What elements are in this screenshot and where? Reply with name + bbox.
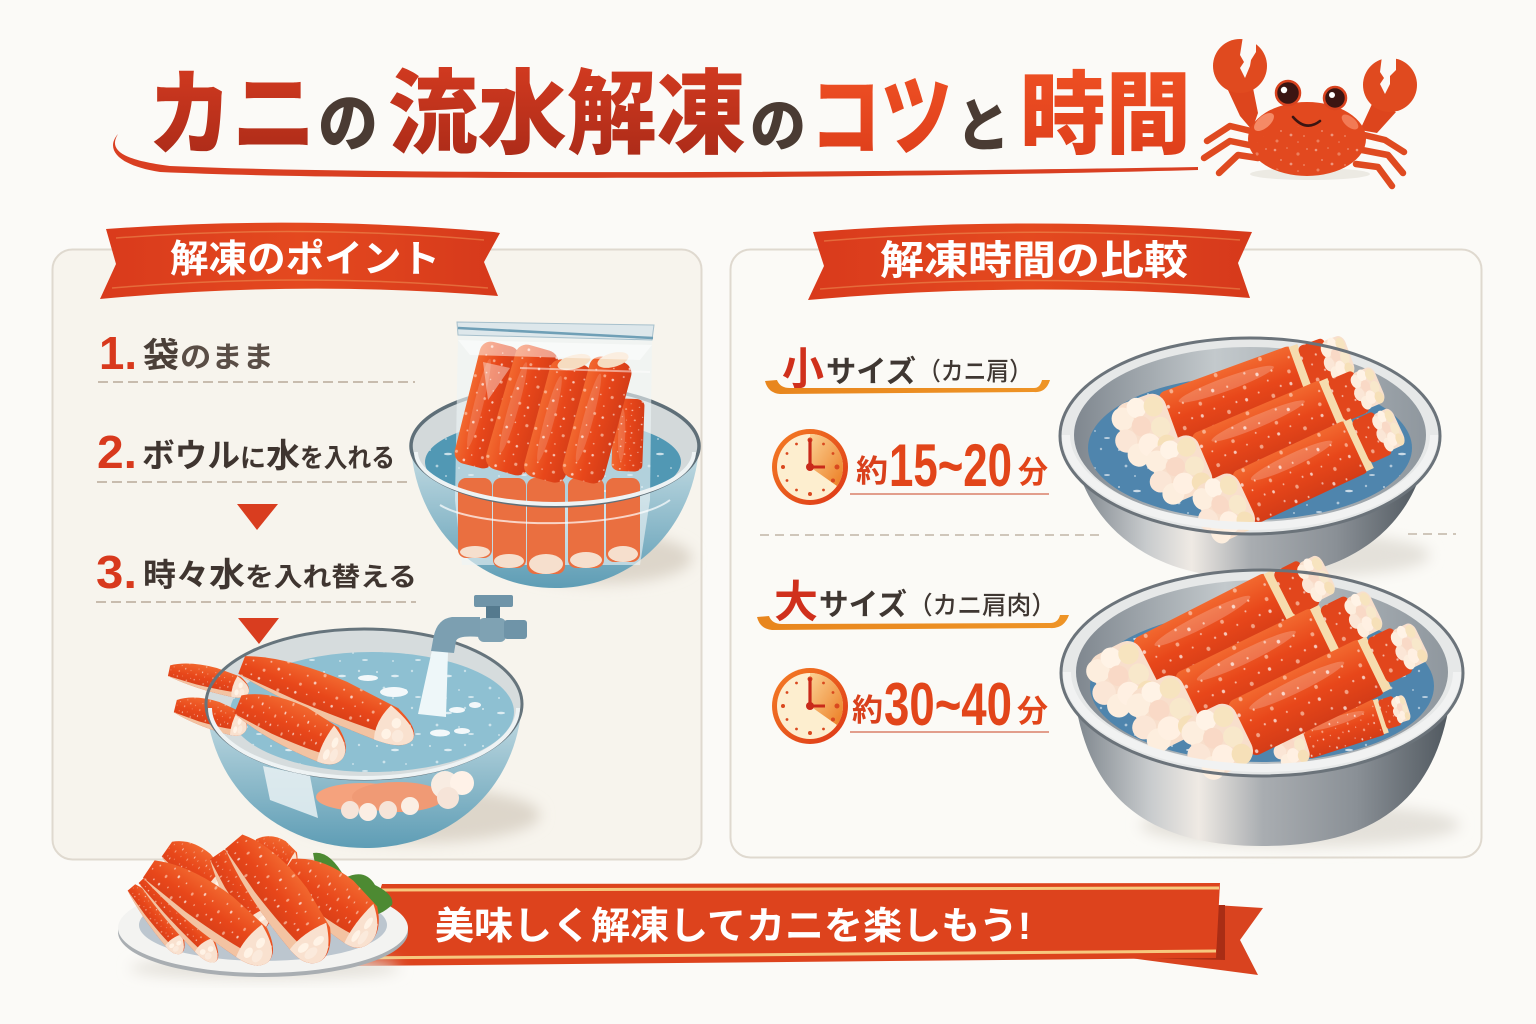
- time: small size: 約: [856, 454, 888, 489]
- title: コツ: [810, 68, 952, 167]
- time: large size: 約: [852, 693, 883, 728]
- step 2: water in bowl: に: [240, 443, 266, 473]
- step 3: change water: [96, 546, 417, 602]
- size label: large: サイズ: [819, 588, 907, 622]
- time: small size: 15~20: [889, 432, 1012, 499]
- heading ribbon: time comparison: 解凍時間の比較: [880, 239, 1188, 283]
- size label: large: （カニ肩肉）: [908, 592, 1056, 620]
- step 2: water in bowl: 水: [266, 437, 300, 474]
- illustration: crab in bowl under running water: [166, 629, 540, 848]
- arrow: step 2 to 3: [237, 504, 278, 530]
- title: 流水解凍: [388, 64, 746, 166]
- icon: clock large: [772, 668, 848, 744]
- time: small size: 分: [1018, 455, 1048, 490]
- step 3: change water: 水: [209, 556, 245, 593]
- panel: time comparison: [730, 250, 1482, 858]
- step 3: change water: 時々: [143, 557, 209, 593]
- illustration: bagged crab in glass bowl: [411, 322, 699, 588]
- step 1: keep in bag: 1.: [99, 327, 137, 379]
- step 2: water in bowl: ボウル: [142, 437, 240, 474]
- panel: thawing points: [52, 250, 702, 860]
- size label: small: サイズ: [826, 355, 916, 389]
- closing banner: [356, 883, 1263, 975]
- title: [148, 62, 1191, 167]
- icon: clock small: [772, 429, 848, 505]
- size label: large: 大: [774, 578, 818, 627]
- step 3: change water: を入れ替える: [245, 562, 417, 592]
- step 1: keep in bag: 袋: [143, 337, 179, 375]
- size label: small: （カニ肩）: [918, 358, 1032, 386]
- heading ribbon: thawing points: 解凍のポイント: [170, 239, 440, 281]
- step 2: water in bowl: [97, 426, 412, 482]
- illustration: steel bowl large crab: [1061, 543, 1463, 847]
- size label: small: 小: [782, 345, 824, 394]
- heading ribbon: time comparison: [808, 224, 1252, 300]
- title: の: [318, 88, 378, 160]
- title: の: [750, 94, 806, 159]
- step 2: water in bowl: 2.: [97, 426, 137, 478]
- illustration: plate of crab legs: [118, 825, 408, 979]
- time: large size: 分: [1017, 694, 1048, 729]
- time: large size: 30~40: [884, 671, 1012, 738]
- step 2: water in bowl: を入れる: [300, 443, 395, 473]
- title: カニ: [148, 62, 316, 167]
- icon: water faucet: [431, 595, 527, 653]
- closing banner: 美味しく解凍してカニを楽しもう!: [435, 906, 1031, 948]
- title: 時間: [1020, 66, 1191, 166]
- step 1: keep in bag: のまま: [180, 342, 274, 374]
- arrow: step 3 to faucet bowl: [238, 618, 279, 644]
- icon: crab mascot: [1204, 36, 1417, 186]
- size label: large: [757, 578, 1069, 630]
- divider between sizes: [760, 534, 1456, 535]
- title underline swoosh: [113, 134, 1198, 178]
- step 1: keep in bag: [98, 327, 415, 382]
- size label: small: [765, 345, 1050, 394]
- title: と: [956, 94, 1010, 159]
- illustration: steel bowl small crab: [1060, 323, 1440, 578]
- heading ribbon: thawing points: [100, 223, 500, 299]
- step 3: change water: 3.: [96, 546, 137, 598]
